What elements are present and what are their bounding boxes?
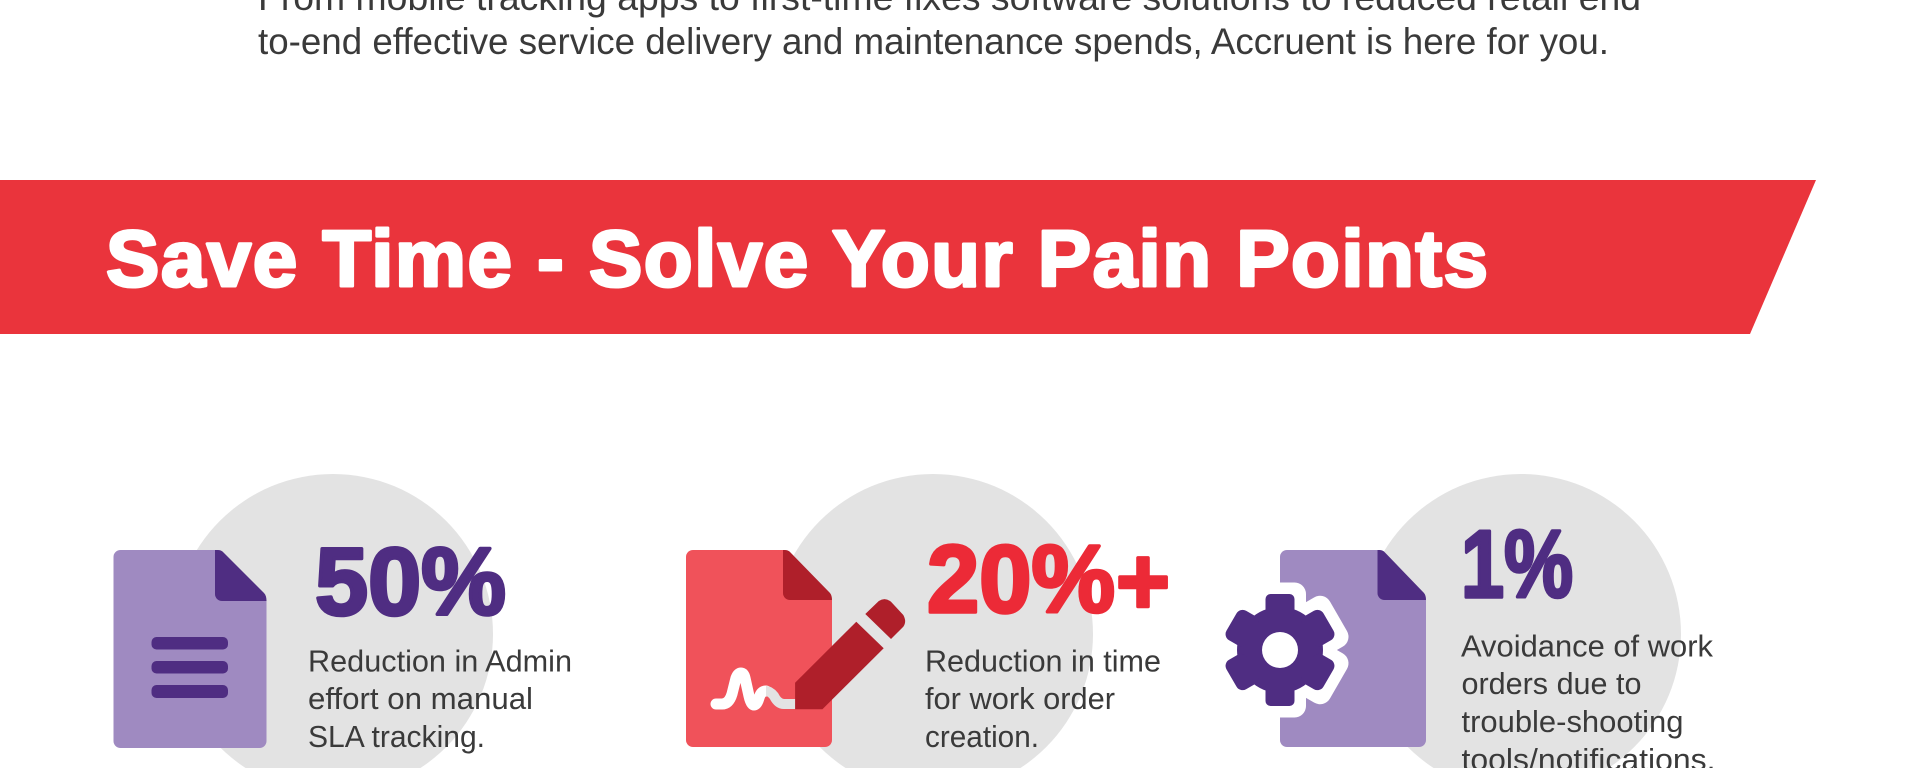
heading: Save Time - Solve Your Pain Points xyxy=(106,214,1488,303)
icon: document with pen xyxy=(686,550,905,747)
heading banner xyxy=(0,180,1816,334)
description: admin effort xyxy=(308,644,572,754)
description: admin effort: effort on manual xyxy=(308,681,533,716)
description: admin effort: Reduction in Admin xyxy=(308,644,572,678)
icon: document xyxy=(114,550,266,748)
intro paragraph: to-end effective service delivery and maintenance spends, Accruent is here for you. xyxy=(258,21,1609,62)
description: work order creation: for work order xyxy=(925,681,1115,716)
description: work order creation xyxy=(925,644,1161,754)
panel: work order creation xyxy=(686,474,1170,768)
description: work order avoidance: trouble-shooting xyxy=(1462,704,1684,739)
description: work order avoidance xyxy=(1461,628,1716,768)
background circle xyxy=(1361,474,1681,768)
stat: 20%+: 20% xyxy=(927,526,1115,633)
background circle xyxy=(173,474,493,768)
panel: work order avoidance xyxy=(1223,474,1716,768)
background circle xyxy=(773,474,1093,768)
description: admin effort: SLA tracking. xyxy=(308,719,485,754)
stat: 1%: 1% xyxy=(1461,511,1573,618)
icon: document with gear xyxy=(1223,550,1426,747)
description: work order creation: Reduction in time xyxy=(925,644,1161,678)
stat: 50%: 50% xyxy=(315,528,506,636)
description: work order avoidance: orders due to xyxy=(1462,666,1642,701)
description: work order avoidance: Avoidance of work xyxy=(1461,628,1713,664)
description: work order creation: creation. xyxy=(925,719,1039,754)
intro paragraph xyxy=(258,0,1641,62)
stat: 20%+: + xyxy=(1116,528,1170,635)
panel: admin effort xyxy=(114,474,572,768)
